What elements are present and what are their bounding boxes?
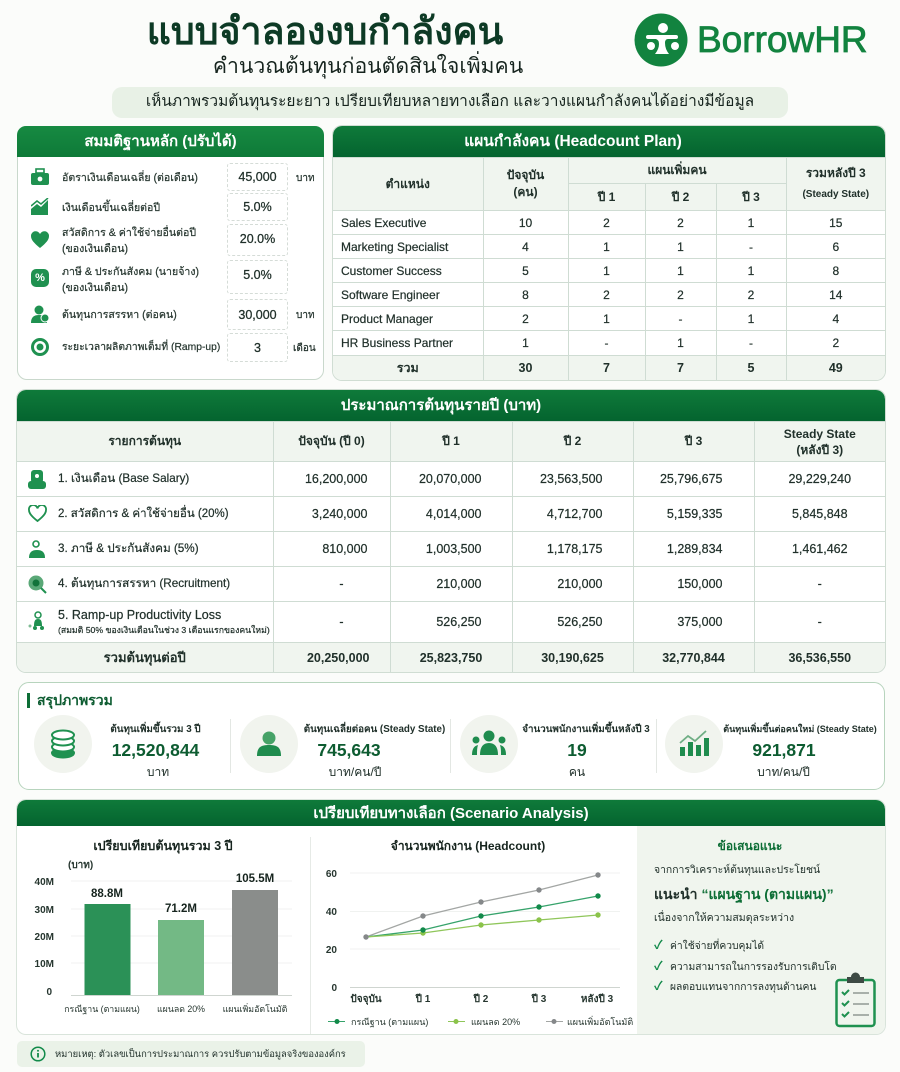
cost table: 1,289,834: [667, 542, 722, 556]
headcount table: 2: [677, 216, 684, 230]
cost table: 375,000: [677, 615, 722, 629]
line chart: headcount: ปี 3: [531, 993, 547, 1005]
assumptions heading: สมมติฐานหลัก (ปรับได้): [84, 133, 237, 150]
headcount table: 4: [522, 240, 529, 254]
headcount table: ปี 2: [672, 190, 689, 204]
cost table: 32,770,844: [662, 651, 725, 665]
cost table: 5,159,335: [667, 507, 722, 521]
KPI unit: บาท/คน/ปี: [329, 765, 381, 779]
line chart: headcount: ปี 2: [473, 993, 489, 1005]
headcount table: 14: [829, 288, 842, 302]
KPI unit: คน: [569, 765, 585, 779]
check item 1: ✓: [654, 938, 663, 952]
check item 1: [654, 938, 764, 952]
KPI unit: บาท: [147, 765, 169, 779]
cost table: 23,563,500: [540, 472, 602, 486]
line chart: headcount: ปี 1: [415, 993, 431, 1005]
unit: บาท: [296, 173, 315, 184]
input: 3: 3: [254, 341, 261, 355]
headcount table: 7: [603, 361, 610, 375]
headcount table: 1: [522, 336, 529, 350]
cost table: ปี 2: [564, 434, 581, 448]
headcount table: ตำแหน่ง: [386, 176, 430, 190]
KPI value: 12,520,844: [112, 740, 199, 760]
KPI: avg cost: [240, 715, 445, 779]
line chart: headcount: [326, 839, 633, 1028]
panel: annual cost estimate: [17, 390, 885, 672]
icon: growth: [31, 198, 48, 215]
icon: team: [460, 715, 518, 773]
headcount table: 49: [829, 361, 843, 375]
input: 3: [227, 333, 288, 362]
headcount table: 6: [832, 240, 839, 254]
divider: [656, 719, 657, 773]
cost table: [17, 421, 885, 672]
recommendation highlight: แนะนำ “แผนฐาน (ตามแผน)”: [654, 886, 834, 902]
logo: BorrowHR: BorrowHR: [697, 19, 868, 60]
chart title: เปรียบเทียบต้นทุนรวม 3 ปี: [93, 839, 233, 854]
icon: chart: [665, 715, 723, 773]
cost table: รายการต้นทุน: [108, 434, 181, 448]
KPI: added employees: [460, 715, 650, 779]
input: 5.0% tax: [227, 260, 288, 294]
input: 45,000: [227, 163, 288, 191]
headcount table: Sales Executive: [341, 216, 426, 230]
tagline pill: [112, 87, 788, 118]
headcount table: ปี 1: [598, 190, 615, 204]
label: tax: ภาษี & ประกันสังคม (นายจ้าง): [62, 266, 199, 278]
check item 1: ค่าใช้จ่ายที่ควบคุมได้: [670, 941, 764, 952]
input: 45,000: 45,000: [238, 170, 277, 184]
label: welfare: [62, 225, 196, 255]
headcount table: Customer Success: [341, 264, 442, 278]
headcount table: 5: [522, 264, 529, 278]
headcount table: 2: [522, 312, 529, 326]
footnote text: หมายเหตุ: ตัวเลขเป็นการประมาณการ ควรปรับตามข้อมูลจริงขององค์กร: [55, 1048, 346, 1059]
scenario heading: เปรียบเทียบทางเลือก (Scenario Analysis): [313, 805, 589, 822]
check item 2: ✓: [654, 959, 663, 973]
label: tax: (ของเงินเดือน): [62, 282, 128, 294]
cost table: 1,003,500: [426, 542, 482, 556]
bar chart: 3-year cost: 105.5M: [236, 873, 274, 885]
icon: clipboard: [835, 972, 876, 1028]
cost heading: [17, 390, 885, 421]
KPI label: ต้นทุนเพิ่มขึ้นรวม 3 ปี: [110, 724, 201, 735]
input: 30,000: [227, 299, 288, 330]
label: welfare: (ของเงินเดือน): [62, 243, 128, 255]
bar chart: 3-year cost: 71.2M: [165, 903, 197, 915]
summary heading: สรุปภาพรวม: [37, 692, 113, 708]
headcount heading: [333, 126, 885, 157]
headcount table: 1: [677, 336, 684, 350]
headcount table: (Steady State): [802, 189, 869, 200]
cost table: 3. ภาษี & ประกันสังคม (5%): [58, 542, 199, 555]
cost table: (สมมติ 50% ของเงินเดือนในช่วง 3 เดือนแรกของคนใหม่): [58, 624, 270, 634]
headcount table: ปี 3: [742, 190, 760, 204]
headcount table: 7: [677, 361, 684, 375]
cost table: 4. ต้นทุนการสรรหา (Recruitment): [58, 577, 230, 590]
cost heading: ประมาณการต้นทุนรายปี (บาท): [341, 397, 541, 414]
icon: percent: %: [35, 272, 45, 284]
line chart: headcount: หลังปี 3: [581, 993, 614, 1005]
KPI: added cost per new hire: [665, 715, 877, 779]
chart title: จำนวนพนักงาน (Headcount): [391, 839, 545, 853]
KPI value: 19: [567, 740, 587, 760]
recommendation reason: เนื่องจากให้ความสมดุลระหว่าง: [654, 912, 794, 924]
label: salary raise: เงินเดือนขึ้นเฉลี่ยต่อปี: [62, 202, 160, 214]
headcount table: 2: [603, 216, 610, 230]
headcount table: 1: [748, 264, 754, 278]
cost table: -: [339, 577, 344, 591]
scenario heading: [17, 800, 885, 826]
KPI label: จำนวนพนักงานเพิ่มขึ้นหลังปี 3: [522, 724, 650, 735]
cost table: 5,845,848: [792, 507, 848, 521]
cost table: 1,178,175: [547, 542, 602, 556]
cost table: 25,796,675: [660, 472, 722, 486]
KPI value: 745,643: [317, 740, 381, 760]
headcount table: 2: [603, 288, 610, 302]
cost table: 16,200,000: [305, 472, 368, 486]
divider: [230, 719, 231, 773]
cost table: Steady State: [784, 426, 856, 440]
bar chart: 3-year cost: 10M: [35, 959, 54, 970]
recommendation heading: ข้อเสนอแนะ: [718, 839, 782, 853]
headcount table: 2: [832, 336, 839, 350]
footnote: [17, 1041, 365, 1067]
bar chart: 3-year cost: กรณีฐาน (ตามแผน): [64, 1004, 140, 1015]
input: 5.0%: [227, 193, 288, 221]
headcount table: Product Manager: [341, 312, 433, 326]
input: 20.0%: [227, 224, 288, 256]
icon: welfare: [28, 505, 47, 522]
headcount heading: แผนกำลังคน (Headcount Plan): [464, 133, 682, 150]
icon: info: [30, 1046, 46, 1062]
bar chart: 3-year cost: 20M: [35, 932, 54, 943]
headcount table: Marketing Specialist: [341, 240, 448, 254]
icon: person: [240, 715, 298, 773]
headcount table: (คน): [513, 185, 538, 199]
headcount table: 1: [748, 312, 754, 326]
headcount table: -: [749, 336, 753, 350]
line chart: headcount: กรณีฐาน (ตามแผน): [351, 1017, 428, 1028]
label: tax: [62, 266, 199, 294]
cost table: (หลังปี 3): [796, 442, 843, 456]
headcount table: รวมหลังปี 3: [806, 166, 866, 180]
cost table: 1. เงินเดือน (Base Salary): [58, 472, 189, 485]
line chart: headcount: 60: [326, 869, 337, 880]
cost table: 29,229,240: [788, 472, 851, 486]
headcount table: 1: [603, 264, 610, 278]
check item 2: ความสามารถในการรองรับการเติบโต: [670, 962, 837, 973]
cost table: 5. Ramp-up Productivity Loss: [58, 608, 221, 622]
cost table: 526,250: [436, 615, 482, 629]
cost table: 4,712,700: [547, 507, 602, 521]
label: average salary: อัตราเงินเดือนเฉลี่ย (ต่อเดือน): [62, 172, 198, 184]
headcount table: 30: [519, 361, 532, 375]
tagline pill: เห็นภาพรวมต้นทุนระยะยาว เปรียบเทียบหลายทางเลือก และวางแผนกำลังคนได้อย่างมีข้อมูล: [146, 93, 754, 110]
headcount table: 4: [832, 312, 839, 326]
bar chart: 3-year cost: 0: [46, 987, 52, 998]
cost table: 20,250,000: [307, 651, 370, 665]
icon: heart: [31, 231, 49, 248]
cost table: 20,070,000: [419, 472, 482, 486]
bar chart: 3-year cost: 88.8M: [91, 888, 123, 900]
bar chart: 3-year cost: แผนลด 20%: [157, 1004, 205, 1014]
headcount table: 2: [677, 288, 684, 302]
check item 3: ✓: [654, 979, 663, 993]
cost table: 810,000: [322, 542, 368, 556]
icon: recruitment search: [28, 576, 47, 594]
bar chart: 3-year cost: 40M: [35, 877, 54, 888]
icon: base salary: [28, 470, 46, 489]
line chart: headcount: แผนเพิ่มอัตโนมัติ: [567, 1015, 633, 1027]
cost table: 150,000: [677, 577, 722, 591]
headcount table: ปัจจุบัน: [507, 168, 544, 182]
bar chart: 3-year cost: แผนเพิ่มอัตโนมัติ: [223, 1003, 288, 1014]
headcount table: Software Engineer: [341, 288, 440, 302]
headcount table: 1: [603, 240, 610, 254]
cost table: ปี 1: [442, 434, 460, 448]
cost table: 3,240,000: [312, 507, 368, 521]
cost table: -: [339, 615, 344, 629]
title: แบบจำลองงบกำลังคน: [147, 10, 503, 52]
headcount table: 8: [832, 264, 839, 278]
cost table: -: [818, 577, 822, 591]
logo: BorrowHR: [634, 14, 868, 66]
KPI label: ต้นทุนเฉลี่ยต่อคน (Steady State): [304, 724, 445, 735]
cost table: 1,461,462: [792, 542, 848, 556]
line chart: headcount: แผนลด 20%: [471, 1017, 520, 1027]
cost table: 210,000: [436, 577, 482, 591]
headcount table: 1: [677, 264, 684, 278]
icon: salary: [31, 168, 49, 185]
headcount table: 1: [748, 216, 754, 230]
panel: assumptions: [17, 126, 324, 380]
input: 20.0%: 20.0%: [240, 232, 275, 246]
cost table: 2. สวัสดิการ & ค่าใช้จ่ายอื่น (20%): [58, 508, 229, 520]
headcount table: 5: [748, 361, 754, 375]
bar chart: 3-year cost: 30M: [35, 905, 54, 916]
cost table: 36,536,550: [788, 651, 851, 665]
panel: headcount plan: [333, 126, 885, 380]
headcount table: 10: [519, 216, 532, 230]
KPI label: ต้นทุนเพิ่มขึ้นต่อคนใหม่ (Steady State): [723, 724, 877, 734]
headcount table: แผนเพิ่มคน: [647, 163, 707, 177]
cost table: 4,014,000: [426, 507, 482, 521]
bar chart: 3-year cost: (บาท): [68, 860, 93, 871]
label: recruitment cost: ต้นทุนการสรรหา (ต่อคน): [62, 309, 177, 321]
icon: percent: [31, 269, 49, 287]
line chart: headcount: 0: [331, 983, 337, 994]
cost table: -: [818, 615, 822, 629]
cost table: 526,250: [557, 615, 602, 629]
check item 3: ผลตอบแทนจากการลงทุนด้านคน: [670, 982, 816, 993]
headcount table: 1: [677, 240, 684, 254]
headcount table: รวม: [397, 361, 419, 375]
unit: บาท: [296, 310, 315, 321]
KPI value: 921,871: [752, 740, 816, 760]
subtitle: คำนวณต้นทุนก่อนตัดสินใจเพิ่มคน: [213, 55, 523, 78]
headcount table: 8: [522, 288, 529, 302]
headcount table: [333, 157, 885, 380]
cost table: 25,823,750: [420, 651, 482, 665]
input: 5.0% tax: 5.0%: [243, 268, 272, 282]
icon: ramp-up loss: [28, 611, 44, 630]
assumptions heading: [17, 126, 324, 157]
headcount table: HR Business Partner: [341, 336, 453, 350]
icon: recruitment: [31, 306, 48, 323]
cost table: ปี 3: [685, 434, 702, 448]
label: welfare: สวัสดิการ & ค่าใช้จ่ายอื่นต่อปี: [62, 227, 196, 239]
cost table: 30,190,625: [541, 651, 604, 665]
bar chart: 3-year cost: [34, 839, 292, 1015]
KPI unit: บาท/คน/ปี: [757, 765, 810, 779]
icon: coins: [34, 715, 92, 773]
recommendation intro: จากการวิเคราะห์ต้นทุนและประโยชน์: [654, 865, 820, 876]
line chart: headcount: 20: [326, 945, 337, 956]
label: ramp-up: ระยะเวลาผลิตภาพเต็มที่ (Ramp-up): [62, 342, 220, 353]
line chart: headcount: 40: [326, 907, 337, 918]
headcount table: -: [749, 240, 753, 254]
headcount table: -: [604, 336, 608, 350]
KPI: added cost: [34, 715, 201, 779]
panel: scenario analysis: [17, 800, 885, 1034]
divider: [450, 719, 451, 773]
input: 5.0%: 5.0%: [243, 200, 272, 214]
line chart: headcount: ปัจจุบัน: [350, 993, 382, 1005]
cost table: 210,000: [557, 577, 602, 591]
headcount table: -: [678, 312, 682, 326]
divider: [310, 837, 311, 1034]
panel: summary: [18, 682, 885, 790]
cost table: ปัจจุบัน (ปี 0): [298, 434, 365, 448]
headcount table: 1: [603, 312, 610, 326]
cost table: รวมต้นทุนต่อปี: [104, 650, 186, 665]
icon: ramp-up: [31, 338, 49, 356]
icon: tax: [29, 540, 45, 558]
headcount table: 2: [748, 288, 754, 302]
input: 30,000: 30,000: [238, 308, 277, 322]
recommendation panel: [637, 826, 885, 1034]
unit: เดือน: [293, 343, 316, 354]
headcount table: 15: [829, 216, 842, 230]
